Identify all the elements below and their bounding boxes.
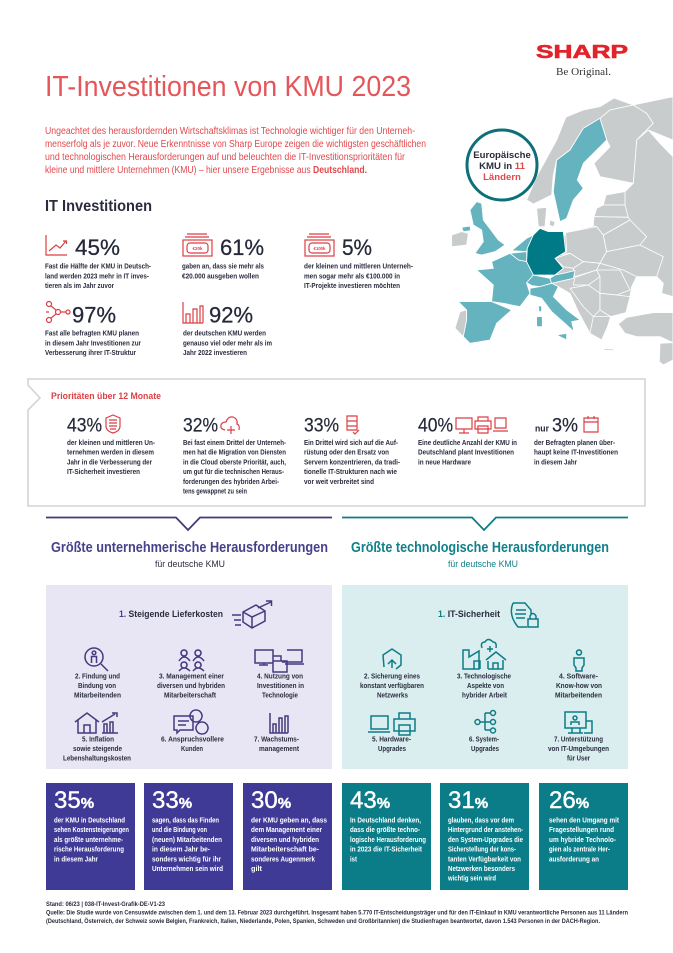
priority: 33%: vor weit verbreitet sind (304, 477, 374, 486)
item 5: sowie steigende (73, 744, 122, 753)
priority: nur 3%: in diesem Jahr (534, 458, 577, 466)
stat box: 35%: als größte unternehme- (54, 835, 123, 844)
priority: 40%: Eine deutliche Anzahl der KMU in (418, 438, 517, 447)
stat box: 43%: in 2023 die IT-Sicherheit (350, 844, 422, 854)
icon: cloud plus (221, 417, 239, 434)
stat box: 30%: Mitarbeiterschaft be- (251, 844, 319, 854)
item 4: Investitionen in (257, 681, 304, 690)
priority: nur 3% (534, 416, 618, 466)
item 6 (469, 710, 499, 753)
stat: 61%: 61% (220, 235, 264, 260)
intro text: kleine und mittlere Unternehmen (KMU) – hier unsere Ergebnisse aus Deutschland. (45, 165, 367, 176)
priority: 43%: der kleinen und mittleren Un- (67, 438, 155, 447)
item 4: 4. Nutzung von (257, 672, 303, 680)
priority: nur 3%: 3% (552, 416, 578, 436)
priority: 32%: forderungen des hybriden Arbei- (183, 477, 279, 486)
logo: SHARP Be Original (536, 42, 628, 78)
panel: Prioritäten über 12 Monate (28, 379, 645, 506)
badge: European SMBs in 11 countries: Europäische (473, 150, 531, 161)
stat: 5%: der kleinen und mittleren Unterneh- (304, 262, 413, 270)
item 4: Mitarbeitenden (555, 690, 602, 700)
section heading: technology challenges: Größte technologische Herausforderungen (351, 540, 609, 556)
stat: 45% (45, 235, 151, 290)
item 5: 5. Hardware- (372, 734, 412, 744)
stat: 45%: 45% (75, 235, 120, 260)
item 6 (161, 710, 224, 753)
stat: 5%: IT-Projekte investieren möchten (304, 281, 400, 290)
stat: 61%: gaben an, dass sie mehr als (182, 262, 264, 270)
icon: banknotes: €20k (192, 246, 203, 251)
footer: source note: (Deutschland, Österreich, der Schweiz sowie Belgien, Frankreich, Italien, Niederlande, Polen, Spanien, Schweden und Großbritannien) die Studienfragen beantwortet, davon 1.543 Personen in der DACH-Region. (46, 916, 600, 925)
item 6: Kunden (181, 744, 203, 753)
stat box: 35%: der KMU in Deutschland (54, 816, 125, 824)
priority: 43% (67, 415, 155, 476)
priority: 40%: Deutschland plant Investitionen (418, 448, 514, 456)
panel: technology challenges: 1. IT-Sicherheit (438, 609, 501, 620)
icon: shield (106, 415, 120, 433)
item 7: 7. Unterstützung (554, 734, 603, 744)
stat box: 30%: gilt (251, 864, 262, 873)
stat box: 43%: logische Herausforderung (350, 835, 426, 844)
stat box: 35% (46, 783, 135, 890)
stat box: 33%: Unternehmen sein wird (152, 864, 223, 873)
item 5 (63, 713, 131, 762)
item 3: 3. Technologische (457, 672, 511, 680)
stat box: 30%: 30% (251, 787, 291, 814)
stat box: 30%: dem Management einer (251, 825, 322, 834)
priority: 43%: ternehmen werden in diesem (67, 448, 154, 456)
priority: nur 3%: nur (535, 424, 549, 434)
stat: 92%: Jahr 2022 investieren (183, 348, 247, 357)
badge: European SMBs in 11 countries (467, 130, 537, 200)
priority: 33%: Ein Drittel wird sich auf die Auf- (304, 438, 398, 447)
section heading: technology challenges: für deutsche KMU (448, 559, 518, 569)
item 3: Mitarbeiterschaft (164, 690, 217, 700)
priority: 32%: tens gewappnet zu sein (183, 486, 247, 496)
section divider: technology (342, 518, 628, 530)
item 3: hybrider Arbeit (462, 690, 508, 700)
panel: technology challenges (342, 585, 628, 769)
stat: 97%: in diesem Jahr Investitionen zur (45, 338, 141, 348)
item 2: Netzwerks (377, 690, 408, 700)
priority: 43%: 43% (67, 416, 102, 436)
priority: 33% (304, 416, 400, 486)
heading: IT Investitionen: IT Investitionen (45, 198, 152, 215)
item 4 (255, 650, 304, 700)
item 3 (457, 640, 511, 700)
stat box: 26%: ausforderung an (549, 854, 599, 864)
stat box: 43%: 43% (350, 787, 390, 814)
item 6: 6. System- (469, 734, 499, 744)
icon: line chart (46, 235, 67, 255)
icon: server check (347, 416, 359, 434)
item 7: für User (567, 754, 590, 762)
priority: 32%: 32% (183, 416, 218, 436)
stat box: 33% (144, 783, 233, 890)
item 7 (548, 712, 609, 762)
intro text: und technologischen Herausforderungen auf und beleuchten die IT-Investitionsprioritäten für (45, 152, 406, 163)
title: IT-Investitionen von KMU 2023 (45, 71, 411, 103)
stat: 92%: 92% (209, 302, 253, 328)
stat box: 30% (243, 783, 332, 890)
stat box: 33%: 33% (152, 787, 192, 814)
footer: source note (46, 901, 628, 925)
stat: 97%: Verbesserung ihrer IT-Struktur (45, 348, 136, 357)
item 5: Lebenshaltungskosten (63, 754, 131, 762)
stat box: 43%: In Deutschland denken, (350, 816, 421, 824)
priority: 33%: tionelle IT-Strukturen nach wie (304, 467, 397, 476)
item 5 (368, 713, 415, 753)
stat box: 35%: in diesem Jahr (54, 854, 98, 864)
item 7 (254, 713, 300, 753)
stat box: 43% (342, 783, 431, 890)
stat box: 26% (539, 783, 628, 890)
priority: 40%: 40% (418, 416, 453, 436)
item 3: Aspekte von (467, 681, 504, 690)
stat box: 31%: Netzwerken besonders (448, 864, 515, 873)
stat box: 33%: (neuen) Mitarbeitenden (152, 835, 222, 844)
stat: 5%: 5% (342, 235, 372, 260)
item 7: von IT-Umgebungen (548, 744, 609, 753)
stat box: 33%: sagen, dass das Finden (152, 816, 219, 824)
priority: 33%: Servern konzentrieren, da tradi- (304, 458, 400, 466)
stat box: 43%: dass die größte techno- (350, 825, 420, 834)
stat box: 30%: der KMU geben an, dass (251, 816, 327, 824)
item 4: 4. Software- (559, 672, 599, 680)
stat: 45%: tieren als im Jahr zuvor (45, 281, 114, 290)
item 2: Mitarbeitenden (74, 690, 121, 700)
priority: 32%: um gut für die technischen Heraus- (183, 467, 284, 476)
section heading: business challenges: Größte unternehmerische Herausforderungen (51, 540, 328, 556)
section heading: business challenges: für deutsche KMU (155, 559, 225, 569)
icon: secure document (511, 603, 538, 627)
priority: 33%: rüstung oder den Ersatz von (304, 448, 389, 456)
item 3 (157, 650, 225, 700)
priority: nur 3%: der Befragten planen über- (534, 438, 615, 447)
priority: 32% (183, 416, 286, 496)
stat: 92% (183, 302, 272, 357)
stat box: 31%: tanten Verfügbarkeit von (448, 854, 521, 864)
stat: 45%: land werden 2023 mehr in IT inves- (45, 272, 149, 280)
section heading: business challenges (51, 540, 328, 569)
item 2 (360, 649, 424, 700)
intro text (45, 126, 426, 176)
priority: 43%: IT-Sicherheit investieren (67, 467, 140, 476)
priority: 32%: in die Cloud oberste Priorität, auch, (183, 458, 286, 466)
panel: business challenges: 1. Steigende Lieferkosten (119, 609, 223, 620)
stat box: 31%: glauben, dass vor dem (448, 816, 514, 824)
priority: 32%: men hat die Migration von Diensten (183, 448, 286, 456)
item 2: 2. Sicherung eines (364, 672, 420, 680)
stat: 5% (304, 234, 413, 290)
stat: 97% (45, 302, 141, 357)
stat: 5%: men sogar mehr als €100.000 in (304, 272, 400, 280)
footer: source note: Stand: 06/23 | 038-IT-Invest-Grafik-DE-V1-23 (46, 901, 165, 908)
item 3: 3. Management einer (159, 672, 224, 680)
item 6: Upgrades (471, 744, 499, 753)
stat box: 30%: sonderes Augenmerk (251, 854, 316, 864)
stat box: 30%: diversen und hybriden (251, 835, 319, 844)
item 4: Know-how von (556, 681, 602, 690)
logo: SHARP Be Original: SHARP (536, 42, 628, 62)
stat box: 35%: 35% (54, 787, 94, 814)
stat box: 31%: Sicherstellung der kons- (448, 844, 516, 854)
priority: nur 3%: haupt keine IT-Investitionen (534, 448, 618, 456)
heading: Prioritäten über 12 Monate (51, 391, 161, 402)
panel: business challenges (46, 585, 332, 769)
item 7: 7. Wachstums- (254, 734, 300, 744)
item 2: Bindung von (78, 681, 116, 690)
stat box: 33%: sonders wichtig für ihr (152, 854, 221, 864)
item 5: Upgrades (378, 744, 406, 753)
stat box: 43%: ist (350, 854, 357, 864)
stat: 97%: Fast alle befragten KMU planen (45, 328, 139, 338)
item 2 (74, 648, 121, 700)
stat box: 33%: in diesem Jahr be- (152, 844, 210, 854)
stat: 92%: genauso viel oder mehr als im (183, 338, 272, 348)
stat: 97%: 97% (72, 302, 116, 328)
icon: bar chart (183, 302, 203, 323)
item 4: Technologie (262, 690, 298, 700)
stat box: 26%: 26% (549, 787, 589, 814)
priority: 43%: Jahr in die Verbesserung der (67, 458, 152, 466)
badge: European SMBs in 11 countries: KMU in 11 (479, 161, 526, 172)
icon: delivery box (232, 601, 272, 628)
item 5: 5. Inflation (82, 734, 114, 744)
stat box: 31%: wichtig sein wird (447, 874, 496, 882)
stat box: 33%: und die Bindung von (152, 825, 207, 834)
priority: 40% (418, 416, 517, 466)
item 7: management (259, 744, 300, 753)
stat: 92%: der deutschen KMU werden (183, 328, 266, 338)
intro text: menserfolg als je zuvor. Neue Erkenntnisse von Sharp Europe zeigen die wichtigsten geschäftlichen (45, 139, 426, 150)
icon: hardware (456, 417, 508, 433)
stat box: 35%: rische Herausforderung (54, 844, 124, 854)
stat box: 26%: gien als zentrale Her- (549, 844, 610, 854)
stat box: 31% (440, 783, 529, 890)
stat: 61%: €20.000 ausgeben wollen (182, 272, 259, 280)
section divider: business (46, 518, 332, 530)
item 3: diversen und hybriden (157, 681, 225, 690)
intro text: Ungeachtet des herausfordernden Wirtschaftsklimas ist Technologie wichtiger für den Unterneh- (45, 126, 415, 137)
icon: banknotes: €100k (314, 246, 326, 251)
item 6: 6. Anspruchsvollere (161, 734, 224, 744)
stat box: 35%: sehen Kostensteigerungen (54, 825, 129, 834)
icon: calendar (584, 416, 598, 432)
item 2: 2. Findung und (75, 672, 120, 680)
map of Europe (452, 97, 673, 365)
stat box: 26%: um hybride Technolo- (549, 835, 616, 844)
stat box: 26%: sehen den Umgang mit (549, 816, 619, 824)
section heading: technology challenges (351, 540, 609, 569)
item 4 (555, 650, 602, 700)
stat box: 31%: den System-Upgrades die (448, 835, 523, 844)
stat box: 31%: Hintergrund der anstehen- (448, 825, 523, 834)
priority: 40%: in neue Hardware (418, 458, 471, 466)
icon: network nodes (46, 302, 70, 322)
stat: 61% (182, 234, 264, 280)
priority: 32%: Bei fast einem Drittel der Unterneh- (183, 438, 286, 447)
logo: SHARP Be Original: Be Original. (556, 66, 611, 78)
badge: European SMBs in 11 countries: Ländern (483, 172, 521, 183)
stat box: 26%: Fragestellungen rund (549, 825, 614, 834)
stat box: 31%: 31% (448, 787, 488, 814)
item 2: konstant verfügbaren (360, 681, 424, 690)
stat: 45%: Fast die Hälfte der KMU in Deutsch- (45, 262, 151, 270)
priority: 33%: 33% (304, 416, 339, 436)
